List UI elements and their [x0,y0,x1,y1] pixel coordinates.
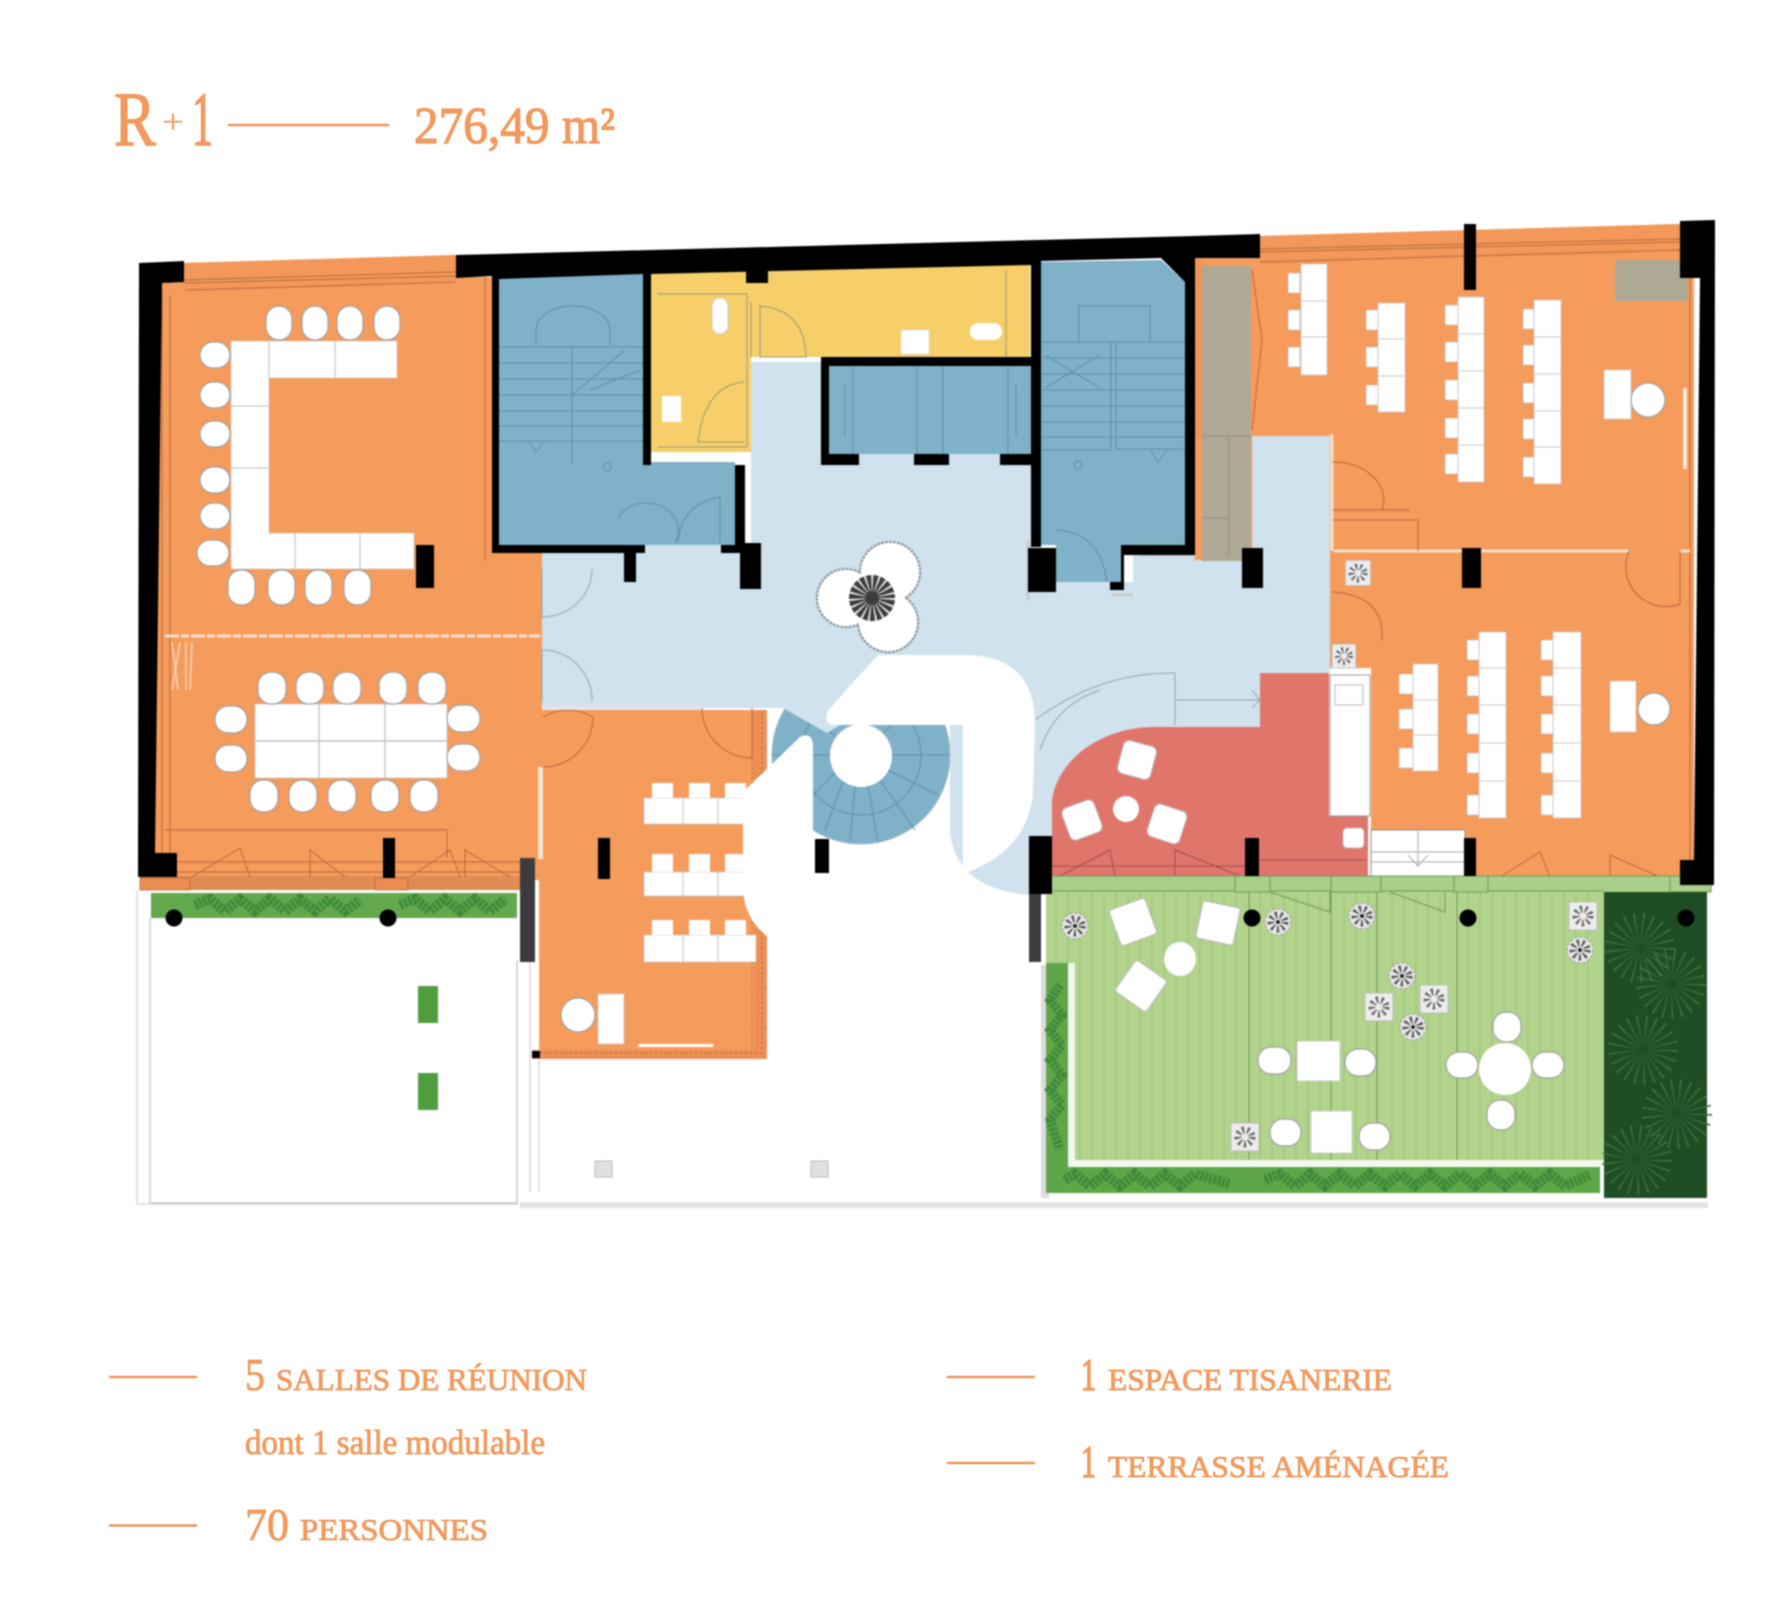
structural walls and pillars [138,220,1715,894]
panel: office with training desks [532,708,767,1059]
planter table in the hall [817,542,920,652]
garden dark green [1604,892,1707,1198]
heading: level and area [114,76,615,162]
spiral stair [772,666,950,844]
list: left features: 5 [245,1349,265,1400]
panel: stairwell right [1041,260,1185,582]
list: left features: PERSONNES [300,1512,488,1547]
panel: kitchenette red area [1052,673,1370,876]
heading: level and area: 1 [192,78,213,162]
dark glass walls [520,858,1041,962]
pillar over overlay [815,839,829,873]
furniture: lower office desks [1332,560,1670,818]
panel: orange left meeting rooms [140,255,542,890]
panel: sanitary block yellow [651,264,1030,452]
heading: level and area: R [114,76,157,162]
panel: circulation corridor [542,362,1330,895]
list: right features: ESPACE TISANERIE [1108,1362,1392,1397]
panel: open space right [1195,224,1694,877]
heading: level and area: + [162,104,184,141]
panel: lift block [829,366,1031,454]
table: rectangular meeting table [172,642,480,812]
left terrace planting [151,893,828,1177]
white overlay icon covering plan centre [743,655,1035,937]
list: right features: TERRASSE AMÉNAGÉE [1108,1449,1449,1484]
panel: stairwell left [499,271,735,545]
list: left features [109,1349,587,1550]
terrace furniture [1062,898,1597,1153]
terrace posts [166,910,1694,926]
panel: terrace deck [1046,876,1711,1166]
heading: level and area: 276,49 m² [414,98,615,155]
furniture: upper office desks [1288,264,1665,484]
taupe storage [1202,266,1251,561]
list: right features [947,1349,1449,1487]
list: left features: dont 1 salle modulable [245,1423,545,1462]
terrace outlines left [137,890,1708,1205]
floor plan [137,220,1715,1205]
list: right features: 1 [1081,1436,1096,1487]
stair landing white box [1371,825,1465,877]
list: left features: 70 [245,1499,289,1550]
list: right features: 1 [1081,1349,1096,1400]
planters around terrace [1046,963,1604,1193]
table: U-shaped meeting table [197,306,414,605]
list: left features: SALLES DE RÉUNION [276,1362,587,1397]
